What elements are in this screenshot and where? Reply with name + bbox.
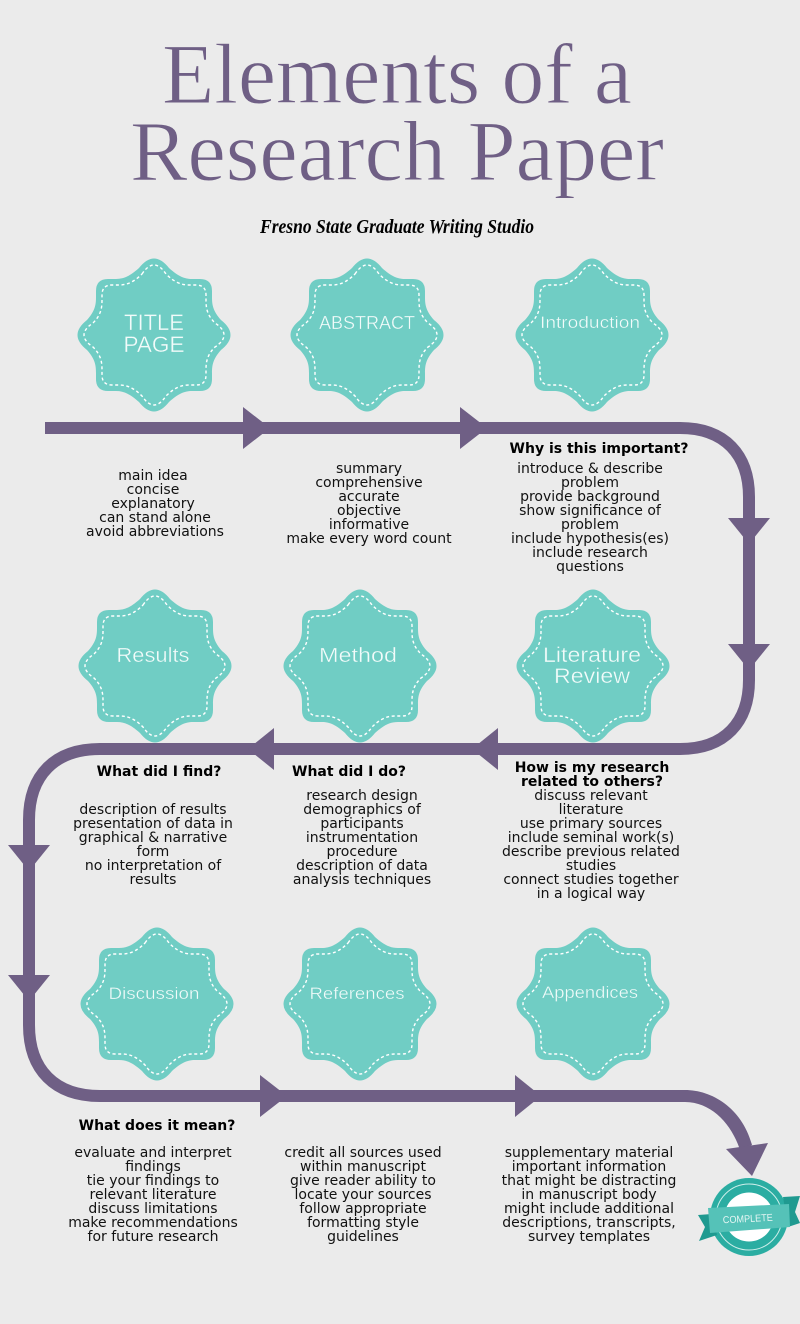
text: discussion: make recommendations (68, 1215, 238, 1231)
text: references: credit all sources used (284, 1145, 442, 1161)
text: title page: main idea (118, 468, 188, 484)
text: literature review: related to others? (521, 774, 663, 790)
badge: appendices (516, 928, 670, 1080)
text: method: research design (306, 788, 418, 804)
text: appendices: that might be distracting (502, 1173, 676, 1189)
badge: references: References (310, 984, 404, 1003)
text: discussion: relevant literature (90, 1187, 216, 1203)
badge: results: Results (116, 645, 190, 667)
text: literature review: literature (559, 802, 623, 818)
text: abstract: summary (336, 461, 402, 477)
text: method: procedure (326, 844, 398, 860)
text: results: presentation of data in (73, 816, 233, 832)
text: introduction (510, 441, 688, 575)
text: references: follow appropriate (299, 1201, 427, 1217)
text: discussion: tie your findings to (87, 1173, 219, 1189)
text: results: graphical & narrative (79, 830, 227, 846)
text: abstract: accurate (338, 489, 400, 505)
text: references: give reader ability to (290, 1173, 436, 1189)
text: discussion (68, 1118, 238, 1245)
text: results: results (130, 872, 176, 888)
text: references: locate your sources (294, 1187, 432, 1203)
text: literature review: describe previous related (502, 844, 680, 860)
text: appendices: survey templates (528, 1229, 650, 1245)
text: method: participants (320, 816, 404, 832)
text: literature review: connect studies together (503, 872, 679, 888)
badge: appendices: Appendices (542, 983, 638, 1002)
title: Elements of a (162, 26, 632, 122)
badge: abstract: ABSTRACT (319, 313, 415, 333)
badge: abstract (290, 258, 444, 412)
text: method: demographics of (303, 802, 422, 818)
badge: discussion: Discussion (108, 984, 200, 1003)
badge: references (284, 928, 436, 1080)
text: abstract: informative (329, 517, 409, 533)
process path arrow (8, 407, 770, 1176)
text: results: form (137, 844, 169, 860)
title: Research Paper (130, 103, 664, 199)
text: discussion: discuss limitations (88, 1201, 218, 1217)
text: introduction: show significance of (519, 503, 662, 519)
text: title page: avoid abbreviations (86, 524, 224, 540)
text: literature review (502, 760, 680, 902)
badge: title page: TITLE (124, 310, 184, 335)
text: references: formatting style (307, 1215, 419, 1231)
text: introduction: introduce & describe (517, 461, 663, 477)
text: references: within manuscript (300, 1159, 426, 1175)
subtitle: Fresno State Graduate Writing Studio (259, 216, 534, 238)
text: introduction: Why is this important? (510, 441, 688, 457)
text: abstract: comprehensive (315, 475, 423, 491)
text: appendices (502, 1145, 676, 1245)
badge: results (78, 590, 232, 742)
text: references (284, 1145, 442, 1245)
badge: literature review: Literature (543, 644, 641, 667)
badge: title page: PAGE (124, 332, 184, 357)
text: method: instrumentation (306, 830, 418, 846)
text: literature review: studies (566, 858, 616, 874)
badge: title page (78, 258, 230, 412)
title (130, 26, 664, 199)
text: method: What did I do? (292, 764, 406, 780)
text: discussion: for future research (88, 1229, 218, 1245)
text: introduction: provide background (520, 489, 660, 505)
text: appendices: might include additional (504, 1201, 674, 1217)
badge: literature review (516, 590, 670, 742)
text: literature review: use primary sources (520, 816, 662, 832)
badge: introduction (516, 258, 668, 412)
badge: method: Method (319, 645, 397, 667)
text: results (73, 764, 233, 888)
text: literature review: include seminal work(s) (508, 830, 674, 846)
text: discussion: evaluate and interpret (74, 1145, 232, 1161)
text: results: description of results (79, 802, 227, 818)
text: abstract: make every word count (286, 531, 452, 547)
badge: method (284, 590, 436, 742)
text: discussion: What does it mean? (79, 1118, 235, 1134)
text: references: guidelines (327, 1229, 399, 1245)
text: results: no interpretation of (85, 858, 222, 874)
badge: introduction: Introduction (540, 313, 640, 332)
icon: complete badge (698, 1178, 800, 1256)
text: introduction: questions (556, 559, 624, 575)
text: literature review: discuss relevant (534, 788, 648, 804)
text: literature review: How is my research (515, 760, 669, 776)
text: introduction: problem (561, 475, 619, 491)
text: title page: explanatory (111, 496, 195, 512)
text: literature review: in a logical way (537, 886, 645, 902)
text: appendices: important information (512, 1159, 666, 1175)
badge: discussion (80, 928, 234, 1080)
text: title page (86, 468, 224, 540)
text: abstract (286, 461, 452, 547)
text: method: description of data (296, 858, 428, 874)
text: introduction: include hypothesis(es) (511, 531, 669, 547)
text: results: What did I find? (97, 764, 221, 780)
text: method: analysis techniques (293, 872, 431, 888)
text: method (292, 764, 431, 888)
text: abstract: objective (337, 503, 401, 519)
text: introduction: include research (532, 545, 648, 561)
badge: literature review: Review (554, 665, 631, 688)
text: appendices: descriptions, transcripts, (502, 1215, 676, 1231)
icon: complete badge: COMPLETE (723, 1213, 773, 1226)
text: discussion: findings (125, 1159, 181, 1175)
text: title page: concise (127, 482, 179, 498)
text: appendices: supplementary material (505, 1145, 673, 1161)
text: appendices: in manuscript body (521, 1187, 657, 1203)
text: title page: can stand alone (99, 510, 211, 526)
text: introduction: problem (561, 517, 619, 533)
